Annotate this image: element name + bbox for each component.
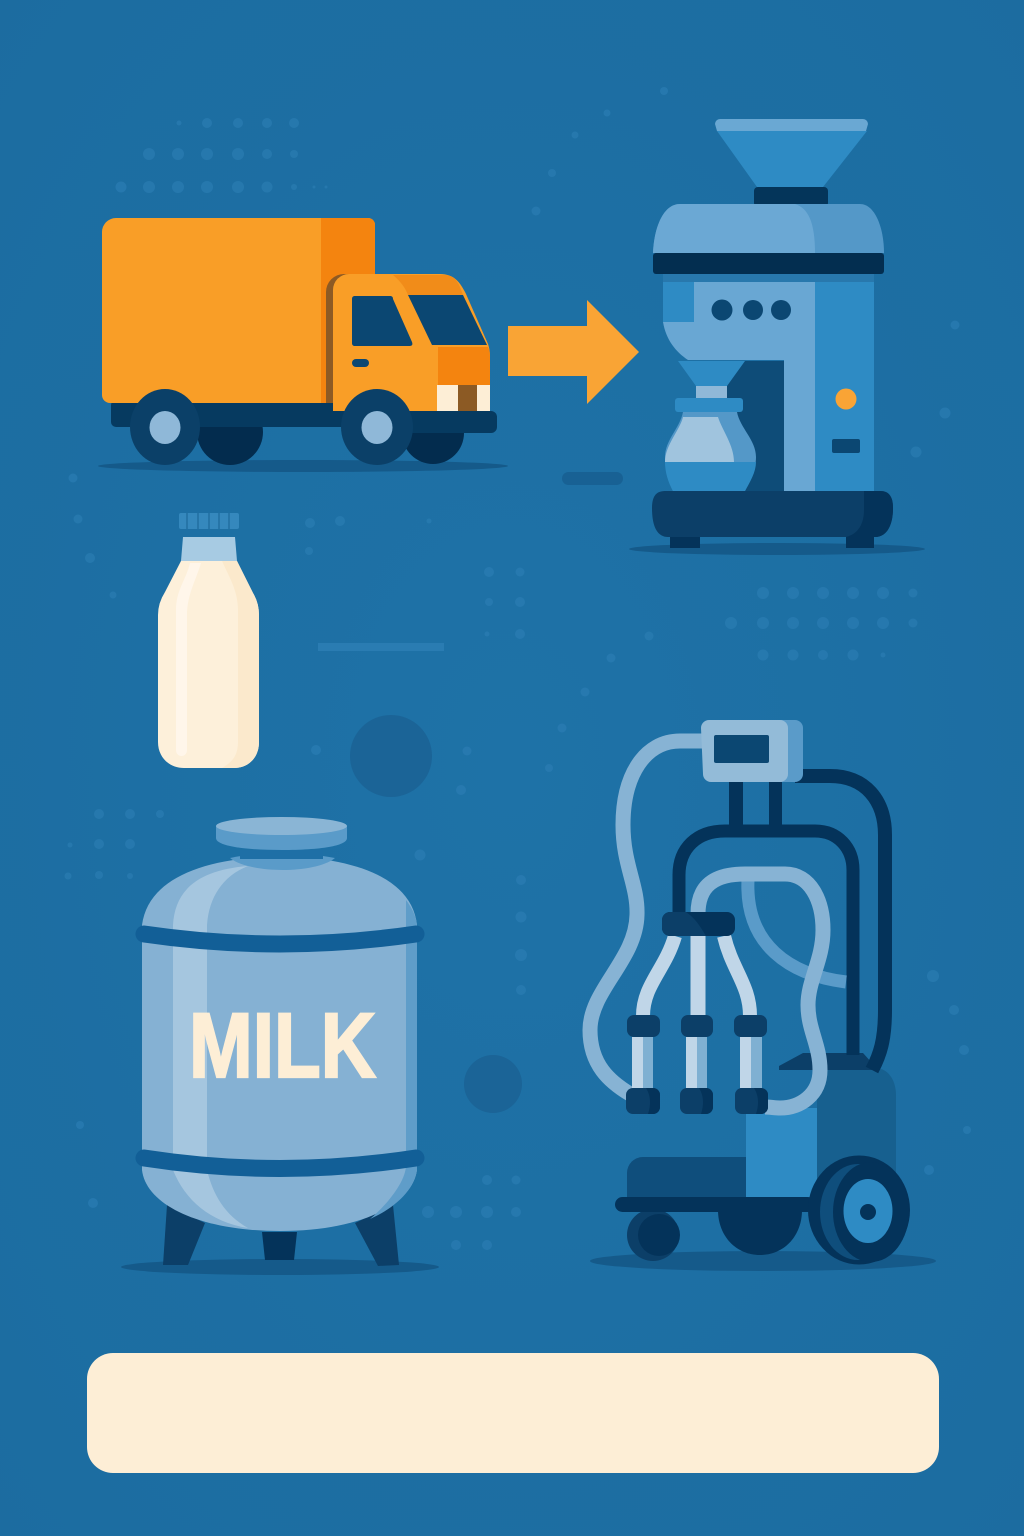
cup left — [626, 1015, 660, 1114]
bottle right shade — [222, 561, 259, 768]
tank neck — [240, 850, 323, 859]
center dome — [718, 1210, 802, 1255]
decorative dark circle upper — [350, 715, 432, 797]
decorative dark circle lower — [464, 1055, 522, 1113]
tank upper band — [144, 934, 416, 944]
inner dark frame — [679, 831, 853, 1055]
cab body — [333, 274, 490, 411]
cab front panel — [438, 347, 490, 385]
secondary hose — [748, 880, 846, 982]
jar — [665, 412, 756, 491]
cart shadow — [590, 1251, 936, 1271]
icon: processing machine — [629, 119, 925, 555]
icon: milk bottle — [158, 513, 259, 768]
door handle — [352, 359, 369, 367]
funnel collar — [754, 187, 828, 207]
truck shadow — [98, 460, 508, 472]
tank shadow — [121, 1259, 439, 1275]
funnel lid — [715, 119, 868, 131]
decorative dark pill — [562, 472, 623, 485]
spout — [678, 361, 745, 386]
headlights and grille — [437, 385, 490, 411]
left cart box — [627, 1157, 746, 1198]
machine shadow — [629, 543, 925, 555]
MILK label: MILK — [189, 995, 376, 1097]
bottle highlight — [176, 563, 201, 756]
caster wheel — [627, 1209, 680, 1261]
milk tubes — [643, 936, 750, 1016]
control box back — [740, 720, 803, 782]
base shade — [846, 491, 893, 537]
front wheel — [341, 389, 413, 465]
body front panel — [663, 274, 815, 491]
machine feet — [670, 537, 874, 548]
funnel cone — [717, 131, 867, 187]
spout neck — [696, 386, 727, 398]
tank lower band — [144, 1158, 416, 1168]
decorative line — [318, 643, 444, 651]
bottle neck — [181, 537, 237, 561]
manifold — [662, 912, 735, 936]
tank legs — [163, 1205, 399, 1266]
cart platform — [615, 1197, 815, 1212]
left hose — [590, 741, 703, 1094]
bottle body — [158, 561, 259, 768]
jar lower fill — [665, 462, 756, 491]
side window — [352, 296, 412, 346]
body top shade — [663, 274, 874, 282]
front blue column — [746, 1108, 817, 1198]
arrow — [508, 300, 639, 404]
background dots — [64, 87, 971, 1250]
cab rear shadow — [326, 274, 354, 403]
control dots — [712, 300, 791, 320]
frame uprights — [729, 780, 782, 830]
machine base — [652, 491, 893, 537]
outer dark frame — [795, 776, 885, 1070]
icon: milking machine — [590, 720, 936, 1271]
jar milk level — [665, 417, 734, 462]
jar lid — [675, 398, 743, 412]
cargo box — [102, 218, 375, 403]
cargo box side shade — [321, 218, 375, 403]
tank lid — [216, 817, 347, 850]
dome highlight — [653, 204, 815, 253]
tank highlight — [173, 1170, 248, 1228]
body left block — [663, 282, 694, 322]
orange button — [836, 388, 856, 410]
right looping hose — [698, 874, 823, 1108]
control box front — [701, 720, 788, 782]
windshield — [408, 295, 487, 345]
rear inner wheels — [197, 399, 464, 465]
tank neck collar — [230, 854, 335, 870]
dome — [653, 204, 884, 253]
control screen — [714, 735, 769, 763]
chassis — [111, 400, 497, 433]
tank body — [142, 856, 417, 1231]
tank right shade — [370, 900, 417, 1219]
cup right — [734, 1015, 768, 1114]
mount plate — [779, 1053, 880, 1070]
rear wheel — [130, 389, 200, 465]
empty caption panel — [87, 1353, 939, 1473]
bottle cap — [179, 513, 239, 529]
icon: milk tank — [121, 817, 439, 1275]
teat cups — [626, 1015, 768, 1114]
big wheel — [808, 1156, 910, 1264]
cup middle — [680, 1015, 713, 1114]
body right panel — [815, 274, 874, 491]
cab roof shade — [393, 275, 463, 295]
dark band — [653, 253, 884, 274]
dispensing opening — [716, 361, 784, 491]
icon: delivery truck — [98, 218, 508, 472]
rear tank — [817, 1068, 896, 1190]
slot — [832, 439, 860, 453]
